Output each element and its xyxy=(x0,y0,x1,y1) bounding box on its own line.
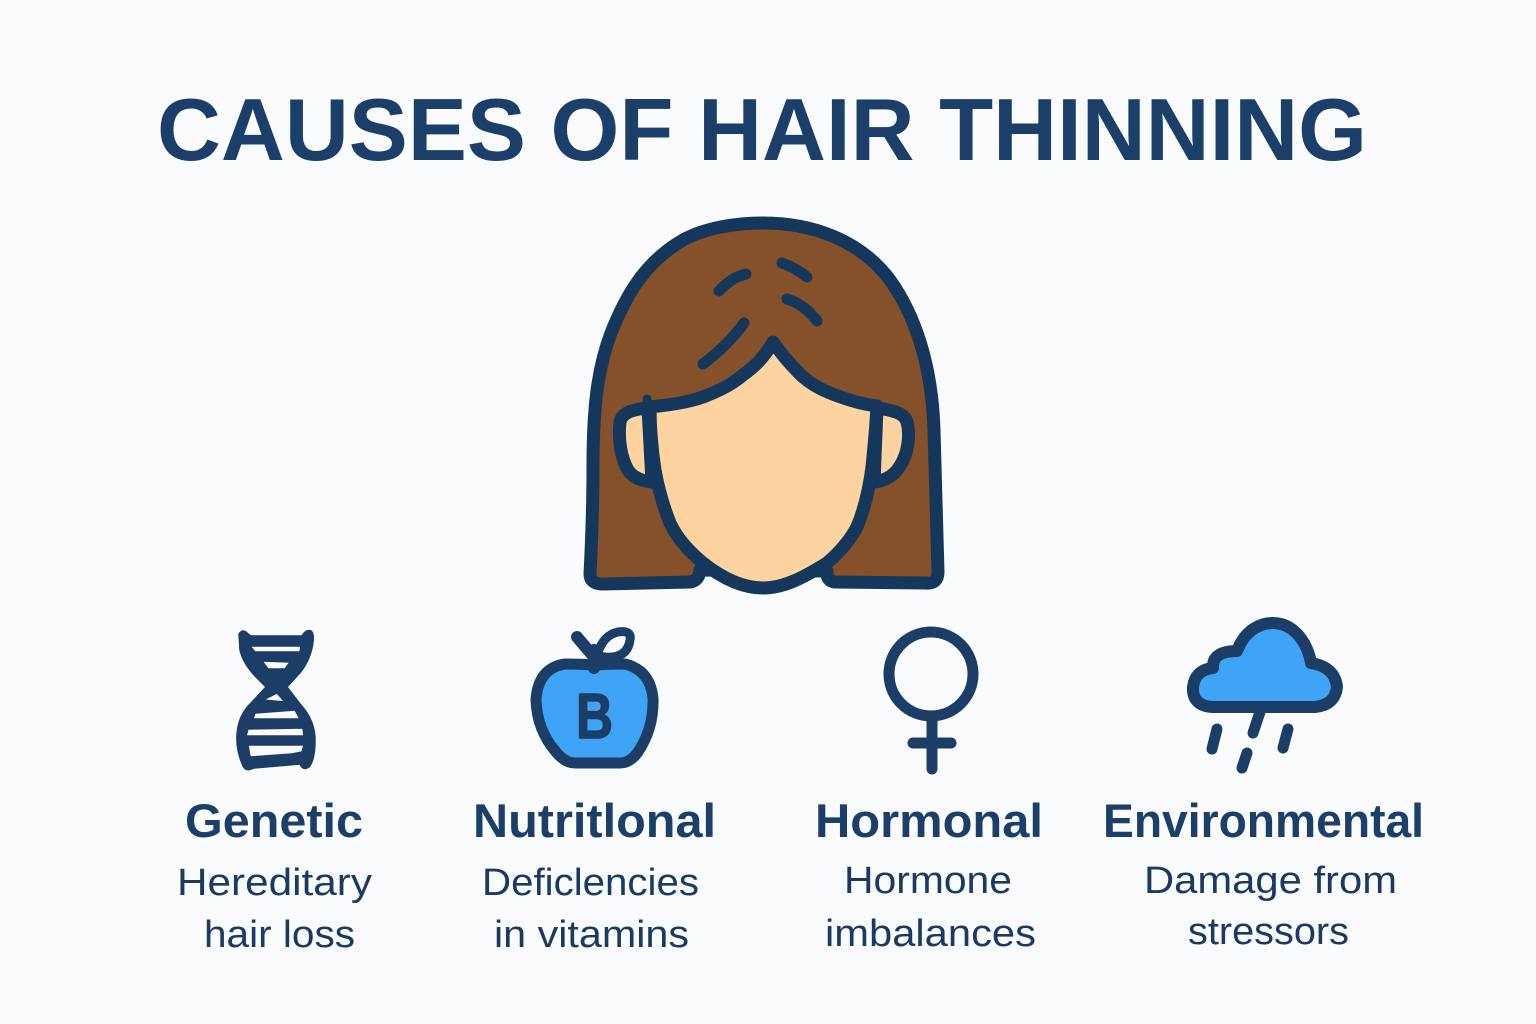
heading: genetic: Genetic xyxy=(185,794,363,847)
description: nutritional xyxy=(482,862,699,956)
icon: female symbol xyxy=(889,632,973,769)
description: environmental: stressors xyxy=(1188,911,1349,953)
heading: environmental: Environmental xyxy=(1103,794,1424,847)
left ear xyxy=(619,408,652,482)
hair xyxy=(590,223,938,584)
hairline nub xyxy=(647,399,648,410)
description: environmental: Damage from xyxy=(1144,860,1397,902)
thinning hair strokes xyxy=(703,263,817,364)
description: genetic: Hereditary xyxy=(177,862,372,904)
icon: apple with letter B: B xyxy=(576,680,613,752)
icon: apple with letter B xyxy=(536,632,653,763)
description: hormonal: Hormone xyxy=(844,860,1012,902)
description: hormonal: imbalances xyxy=(825,913,1036,955)
icon: DNA helix xyxy=(237,631,315,770)
column: environmental xyxy=(1103,623,1424,953)
right ear xyxy=(874,408,909,482)
title: CAUSES OF HAIR THINNING xyxy=(157,80,1367,179)
heading: hormonal: Hormonal xyxy=(815,794,1043,847)
description: nutritional: Deficlencies xyxy=(482,862,699,904)
face xyxy=(650,342,877,588)
description: genetic xyxy=(177,862,372,956)
illustration: head with thinning hair xyxy=(590,223,938,588)
icon: rain cloud xyxy=(1193,623,1337,768)
description: environmental xyxy=(1144,860,1397,953)
description: hormonal xyxy=(825,860,1036,955)
heading: nutritional: Nutritlonal xyxy=(473,794,716,847)
column: genetic xyxy=(177,631,372,956)
description: genetic: hair loss xyxy=(204,914,355,956)
column: hormonal xyxy=(815,632,1043,955)
column: nutritional xyxy=(473,632,716,956)
description: nutritional: in vitamins xyxy=(494,914,689,956)
